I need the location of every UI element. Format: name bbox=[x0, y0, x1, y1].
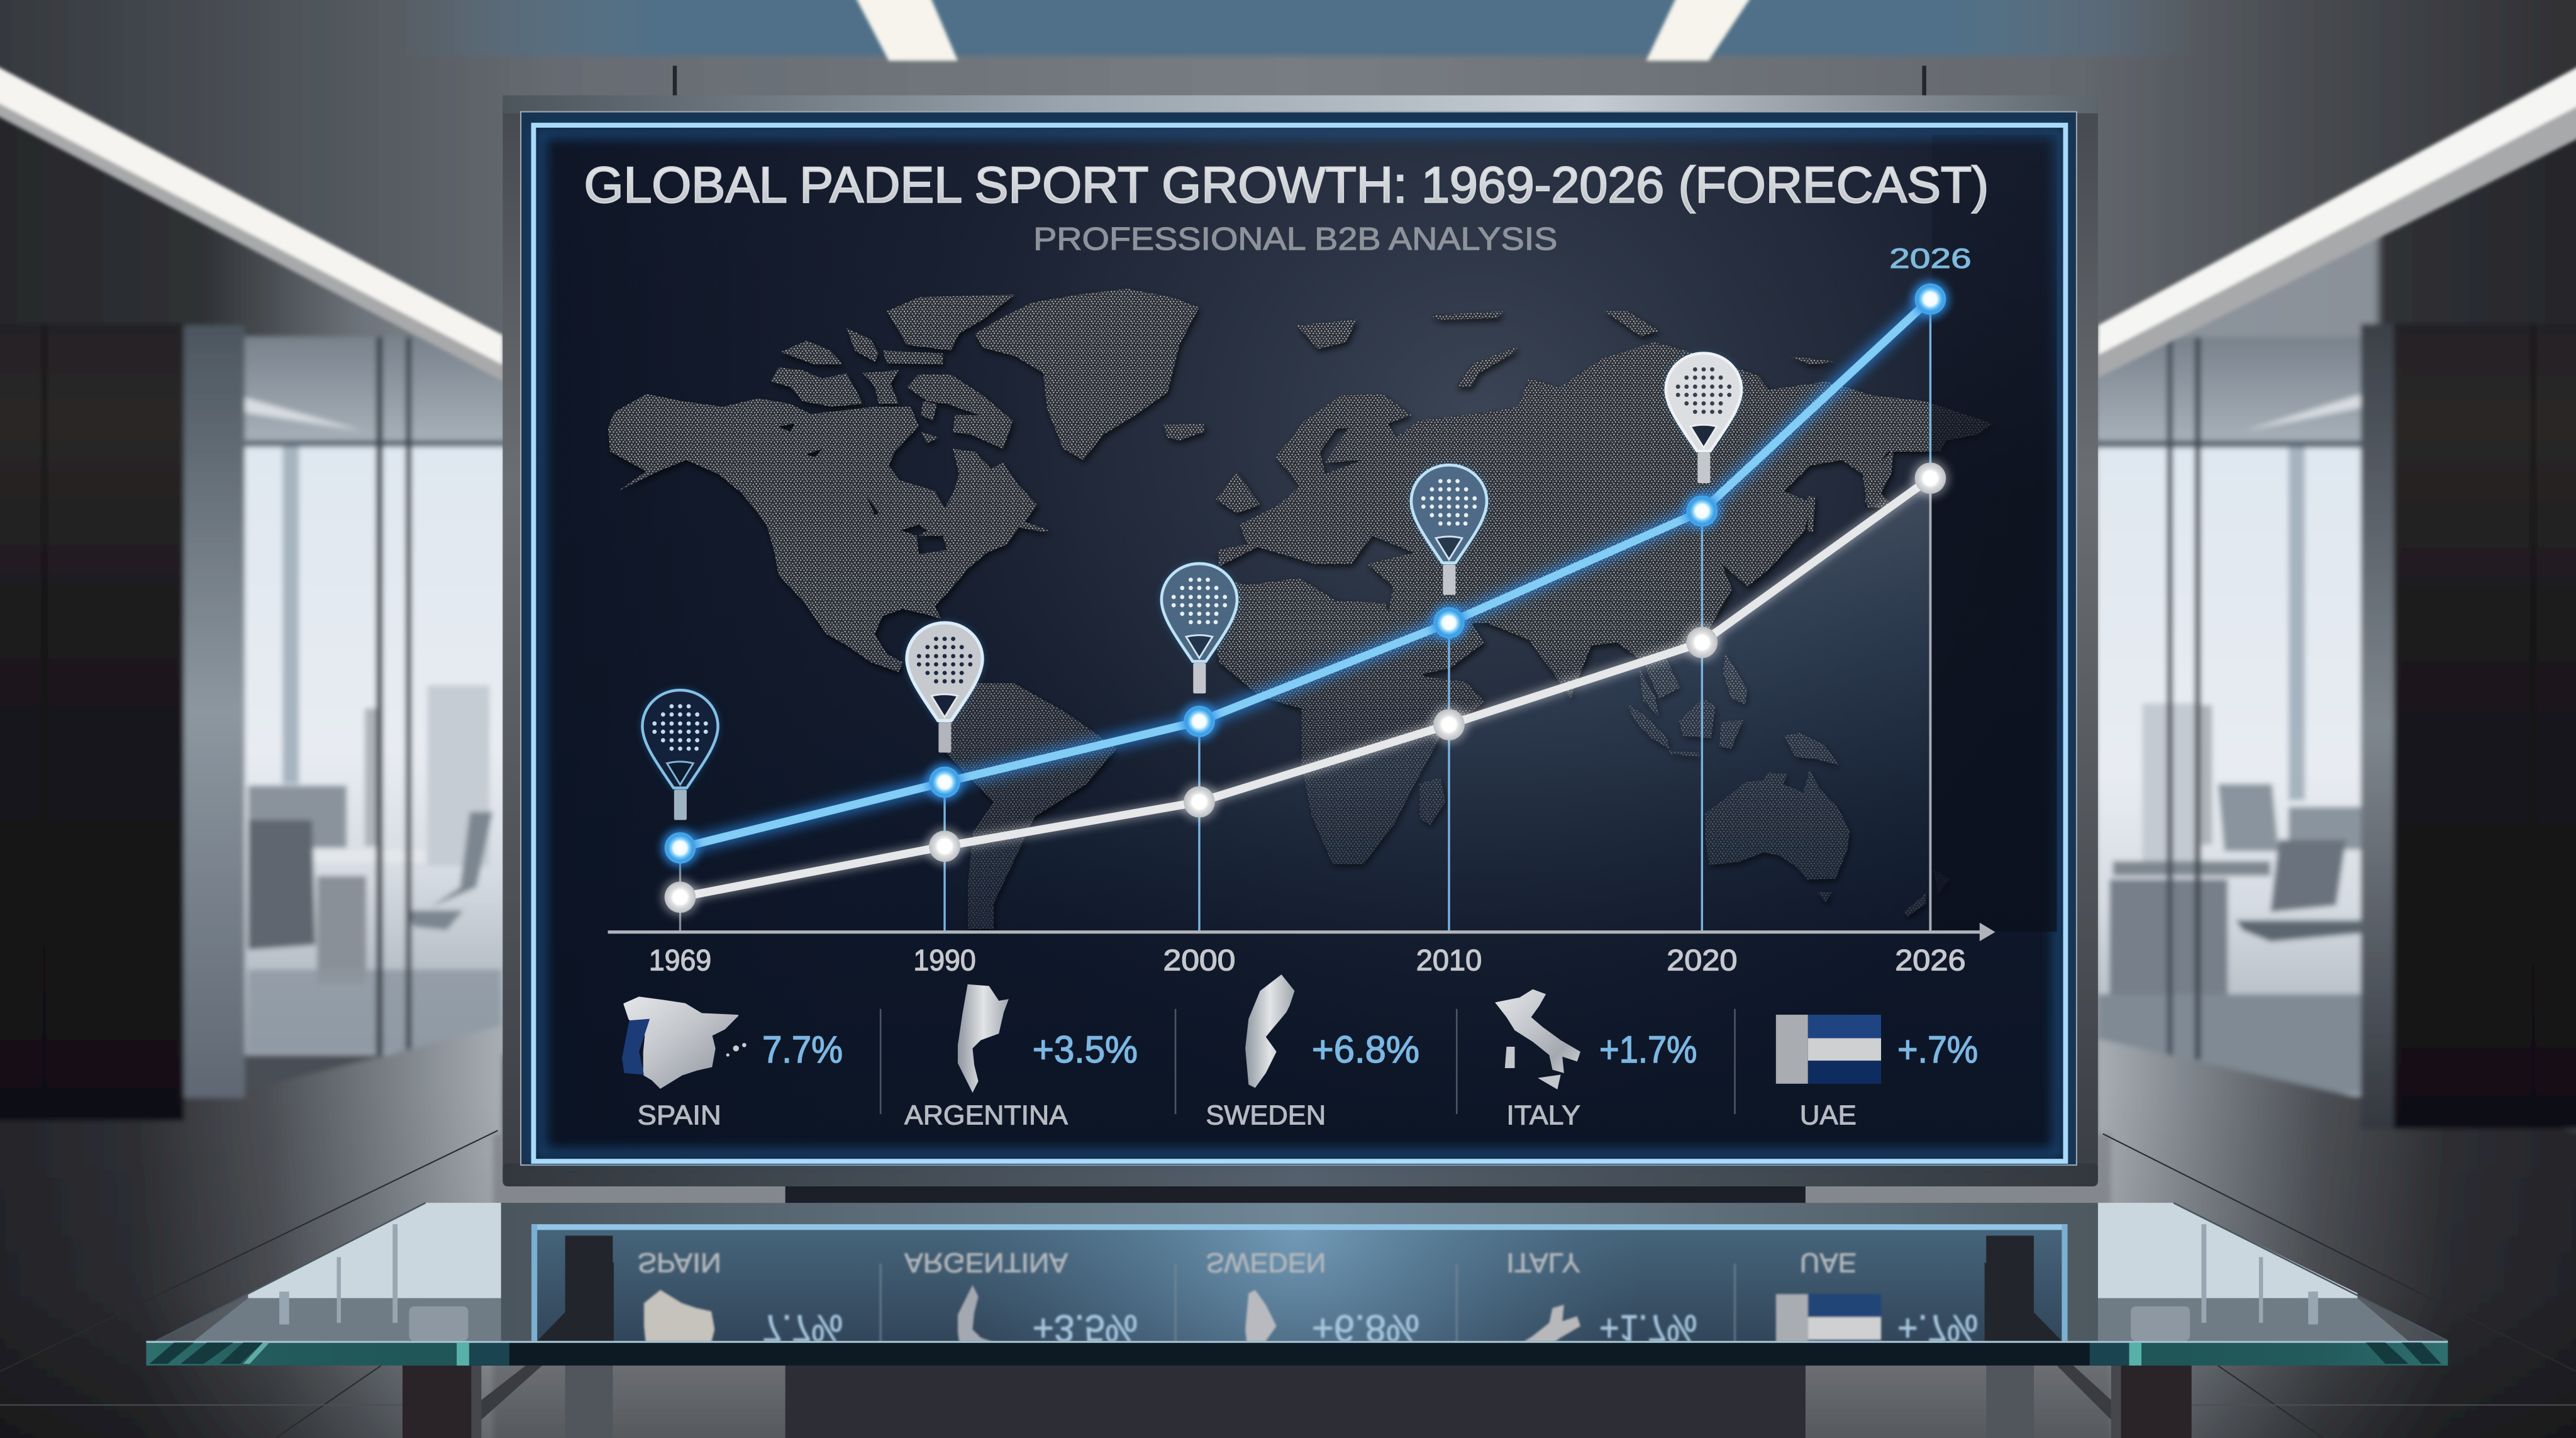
drop lines bbox=[680, 299, 1930, 932]
reflected stats: SPAIN bbox=[638, 1247, 721, 1277]
title: GLOBAL PADEL SPORT GROWTH: 1969-2026 (FORECAST) bbox=[584, 157, 1989, 213]
stat: UAE: UAE bbox=[1800, 1101, 1857, 1131]
forecast year label: 2026 bbox=[1889, 243, 1972, 274]
reflected stats: ARGENTINA bbox=[904, 1247, 1068, 1277]
blue nodes bbox=[661, 280, 1949, 867]
axis year labels: 2010 bbox=[1416, 944, 1482, 977]
reflected stats: 7.7% bbox=[762, 1307, 843, 1349]
stat: Argentina: ARGENTINA bbox=[904, 1101, 1068, 1131]
screen frame bbox=[502, 96, 2098, 1186]
right office windows bbox=[2096, 337, 2367, 447]
stat: UAE: +.7% bbox=[1897, 1028, 1978, 1071]
stat: Italy: ITALY bbox=[1506, 1101, 1580, 1131]
dark band right of forecast line bbox=[1932, 135, 2057, 932]
dark columns bbox=[0, 324, 184, 1121]
stat: Sweden bbox=[1206, 974, 1419, 1131]
stat: Spain bbox=[622, 998, 843, 1131]
stat: Sweden: +6.8% bbox=[1312, 1028, 1419, 1071]
time axis bbox=[608, 923, 1996, 941]
screen reflection bbox=[531, 1224, 2068, 1341]
display stand above table bbox=[786, 1180, 1806, 1210]
stat: Argentina bbox=[904, 984, 1138, 1131]
ceiling light strips bbox=[0, 0, 2576, 381]
hanging cables bbox=[673, 65, 1926, 96]
table legs bbox=[402, 1357, 2192, 1438]
axis year labels: 2000 bbox=[1163, 944, 1235, 977]
left office windows bbox=[243, 337, 506, 447]
stat: Sweden: SWEDEN bbox=[1206, 1101, 1326, 1131]
racket 1969 bbox=[642, 690, 718, 820]
lit area under growth lines bbox=[945, 478, 1930, 932]
glass table top bbox=[156, 1203, 2448, 1341]
reflected stats: ITALY bbox=[1506, 1247, 1580, 1277]
floor lines bbox=[0, 1130, 2576, 1438]
stat: Italy: +1.7% bbox=[1599, 1028, 1697, 1071]
reflected stats: SWEDEN bbox=[1206, 1247, 1326, 1277]
glass table front edge bbox=[146, 1341, 2448, 1366]
floors bbox=[0, 1025, 502, 1438]
reflected stats bbox=[638, 1252, 1979, 1341]
stat: Spain: 7.7% bbox=[762, 1028, 843, 1071]
reflected stats: UAE bbox=[1800, 1247, 1857, 1277]
racket 1990 bbox=[907, 623, 982, 752]
lower ceiling left and right bbox=[0, 107, 502, 452]
stat: Argentina: +3.5% bbox=[1033, 1028, 1138, 1071]
racket 2000 bbox=[1162, 564, 1237, 693]
white nodes bbox=[661, 459, 1949, 916]
stat: Spain: SPAIN bbox=[638, 1101, 721, 1131]
racket 2020 bbox=[1666, 354, 1741, 483]
reflected stats: +3.5% bbox=[1033, 1307, 1138, 1349]
country dividers bbox=[880, 1009, 1735, 1114]
axis year labels: 1969 bbox=[649, 944, 711, 977]
axis year labels bbox=[649, 944, 1966, 977]
stat: Italy bbox=[1495, 989, 1697, 1131]
reflected stats: +1.7% bbox=[1599, 1307, 1697, 1349]
world map bbox=[591, 279, 2021, 937]
racket 2010 bbox=[1411, 465, 1487, 595]
white growth line bbox=[680, 478, 1930, 897]
stat: UAE bbox=[1776, 1015, 1978, 1131]
reflected stats: +6.8% bbox=[1312, 1307, 1419, 1349]
blue growth line bbox=[680, 299, 1930, 848]
screen panel bbox=[533, 125, 2065, 1161]
axis year labels: 2026 bbox=[1895, 944, 1966, 977]
axis year labels: 2020 bbox=[1667, 944, 1737, 977]
subtitle: PROFESSIONAL B2B ANALYSIS bbox=[1033, 221, 1557, 257]
reflected stats: +.7% bbox=[1897, 1307, 1978, 1349]
stand below table bbox=[786, 1356, 1806, 1438]
axis year labels: 1990 bbox=[913, 944, 976, 977]
